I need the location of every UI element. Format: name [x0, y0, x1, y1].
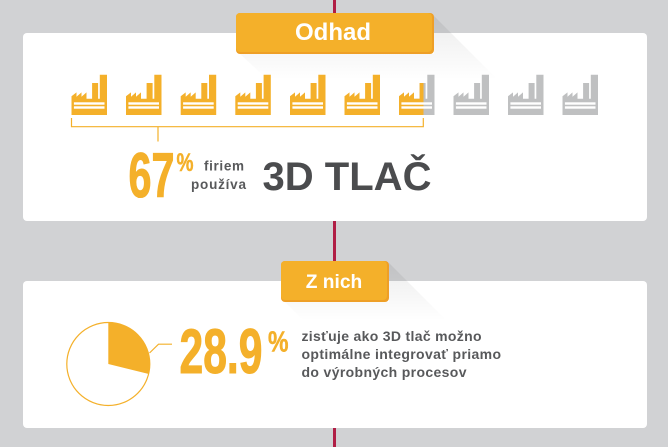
icon: factory 10 [562, 75, 598, 115]
icon: factory 2 [126, 75, 162, 115]
text: firiem používa: používa [191, 177, 246, 192]
pie chart: 28.9% [67, 322, 150, 406]
icon: factory 7 partly filled [399, 75, 434, 115]
icon: factory 4 [235, 75, 271, 115]
leader line [150, 344, 172, 353]
text block: description: do výrobných procesov [302, 364, 467, 380]
tab shadow [240, 16, 498, 80]
icon: factory 3 [181, 75, 216, 115]
text: firiem používa [191, 158, 246, 192]
tab shadow [285, 263, 447, 321]
icon: factory 6 [344, 75, 380, 115]
icon: factory 8 [454, 75, 489, 115]
stat: 67%: % [176, 149, 194, 177]
text: firiem používa: firiem [204, 158, 244, 174]
icon: factory 9 [508, 75, 544, 115]
bracket [72, 118, 423, 142]
heading tab: Z nich: Z nich [306, 272, 362, 293]
icon: factory 5 [290, 75, 326, 115]
text block: description: optimálne integrovať priamo [302, 346, 501, 362]
timeline line [333, 0, 336, 447]
text: 3D TLAČ: 3D TLAČ [262, 153, 432, 199]
heading tab: Z nich [281, 261, 389, 302]
text block: description [302, 328, 501, 380]
panel: of them [23, 261, 647, 428]
heading tab: Odhad [236, 13, 434, 54]
stat: 28.9%: 28.9 [180, 317, 262, 387]
icon row: factories [72, 75, 598, 115]
heading tab: Odhad: Odhad [295, 19, 371, 46]
text block: description: zisťuje ako 3D tlač možno [302, 328, 482, 344]
stat: 67%: 67 [128, 141, 174, 211]
icon: factory 1 [72, 75, 107, 115]
stat: 28.9%: % [268, 326, 289, 358]
panel: estimate [23, 13, 647, 221]
